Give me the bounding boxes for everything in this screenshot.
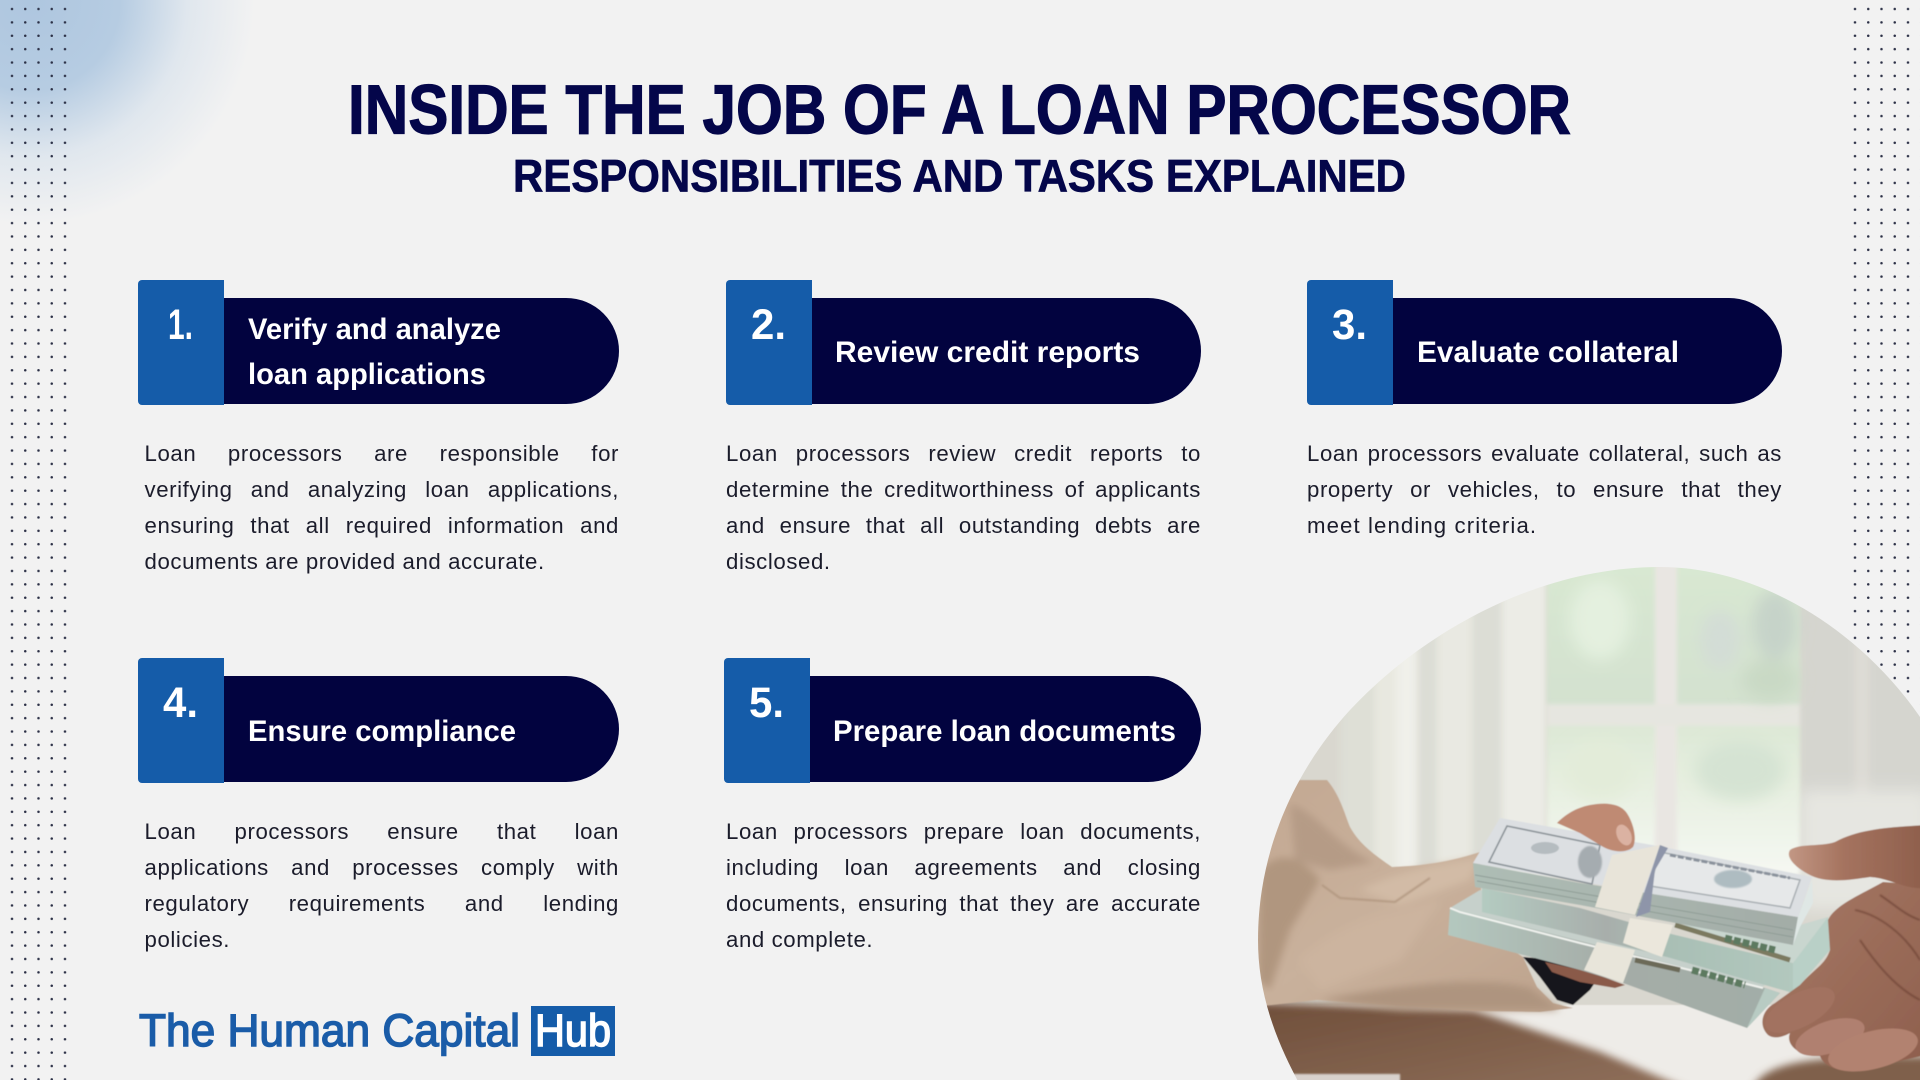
window and curtain backdrop — [1278, 567, 1920, 1006]
description 4: applications and processes comply with — [144, 855, 619, 880]
panel: step 1 — [138, 280, 619, 574]
description 5: documents, ensuring that they are accurate — [726, 891, 1201, 916]
description 1: ensuring that all required information and — [144, 513, 619, 538]
description 2: disclosed. — [726, 549, 831, 574]
logo: The Human Capital Hub: The Human Capital — [139, 1005, 520, 1056]
description 2 — [726, 441, 1201, 574]
heading 1: Verify and analyze — [248, 313, 501, 346]
heading 1: loan applications — [248, 358, 486, 391]
wooden table — [1250, 1002, 1920, 1080]
description 4: policies. — [144, 927, 230, 952]
description 2: determine the creditworthiness of applicants — [726, 477, 1201, 502]
middle cash stack — [1482, 888, 1830, 993]
number badge 3: 3. — [1332, 301, 1367, 349]
black inner cuff and fingers — [1523, 957, 1625, 1005]
number badge 2: 2. — [751, 301, 786, 349]
description 2: Loan processors review credit reports to — [726, 441, 1201, 466]
heading 2: Review credit reports — [835, 336, 1140, 369]
heading 1 — [248, 313, 501, 391]
description 1: verifying and analyzing loan applications, — [144, 477, 619, 502]
description 4 — [144, 819, 619, 952]
number badge 2 — [726, 280, 812, 405]
panel: step 5 — [724, 658, 1201, 952]
main heading: INSIDE THE JOB OF A LOAN PROCESSOR — [348, 70, 1571, 148]
description 1: Loan processors are responsible for — [144, 441, 619, 466]
description 4: Loan processors ensure that loan — [144, 819, 619, 844]
header bar — [1392, 298, 1782, 404]
photo: hands exchanging stacks of cash — [1258, 567, 1920, 1080]
number badge 4: 4. — [163, 679, 198, 727]
description 1: documents are provided and accurate. — [144, 549, 545, 574]
number badge 4 — [138, 658, 224, 783]
header bar — [809, 676, 1201, 782]
number badge 5 — [724, 658, 810, 783]
logo: The Human Capital Hub: Hub — [535, 1005, 611, 1056]
paper currency bands — [1584, 845, 1673, 983]
panel: step 2 — [726, 280, 1201, 574]
header bar — [224, 298, 619, 404]
bottom cash stack — [1448, 890, 1780, 1028]
panel: step 4 — [138, 658, 619, 952]
left thumb — [1557, 804, 1635, 851]
top cash stack — [1473, 818, 1813, 945]
description 2: and ensure that all outstanding debts are — [726, 513, 1201, 538]
description 5: and complete. — [726, 927, 873, 952]
description 5 — [726, 819, 1201, 952]
description 1 — [144, 441, 619, 574]
description 3: property or vehicles, to ensure that they — [1307, 477, 1782, 502]
number badge 1: 1. — [168, 301, 193, 349]
number badge 3 — [1307, 280, 1393, 405]
right hand — [1758, 825, 1920, 1080]
description 5: Loan processors prepare loan documents, — [726, 819, 1201, 844]
description 3: meet lending criteria. — [1307, 513, 1537, 538]
number badge 5: 5. — [749, 679, 784, 727]
heading 4: Ensure compliance — [248, 715, 516, 748]
description 3 — [1307, 441, 1782, 538]
title — [348, 70, 1571, 202]
heading 5: Prepare loan documents — [833, 715, 1176, 748]
number badge 1 — [138, 280, 224, 405]
subheading: RESPONSIBILITIES AND TASKS EXPLAINED — [513, 150, 1406, 202]
description 3: Loan processors evaluate collateral, such as — [1307, 441, 1782, 466]
heading 3: Evaluate collateral — [1417, 336, 1679, 369]
panel: step 3 — [1307, 280, 1782, 538]
header bar — [811, 298, 1201, 404]
description 5: including loan agreements and closing — [726, 855, 1201, 880]
header bar — [224, 676, 619, 782]
description 4: regulatory requirements and lending — [144, 891, 619, 916]
left arm in beige sleeve — [1240, 780, 1573, 1012]
